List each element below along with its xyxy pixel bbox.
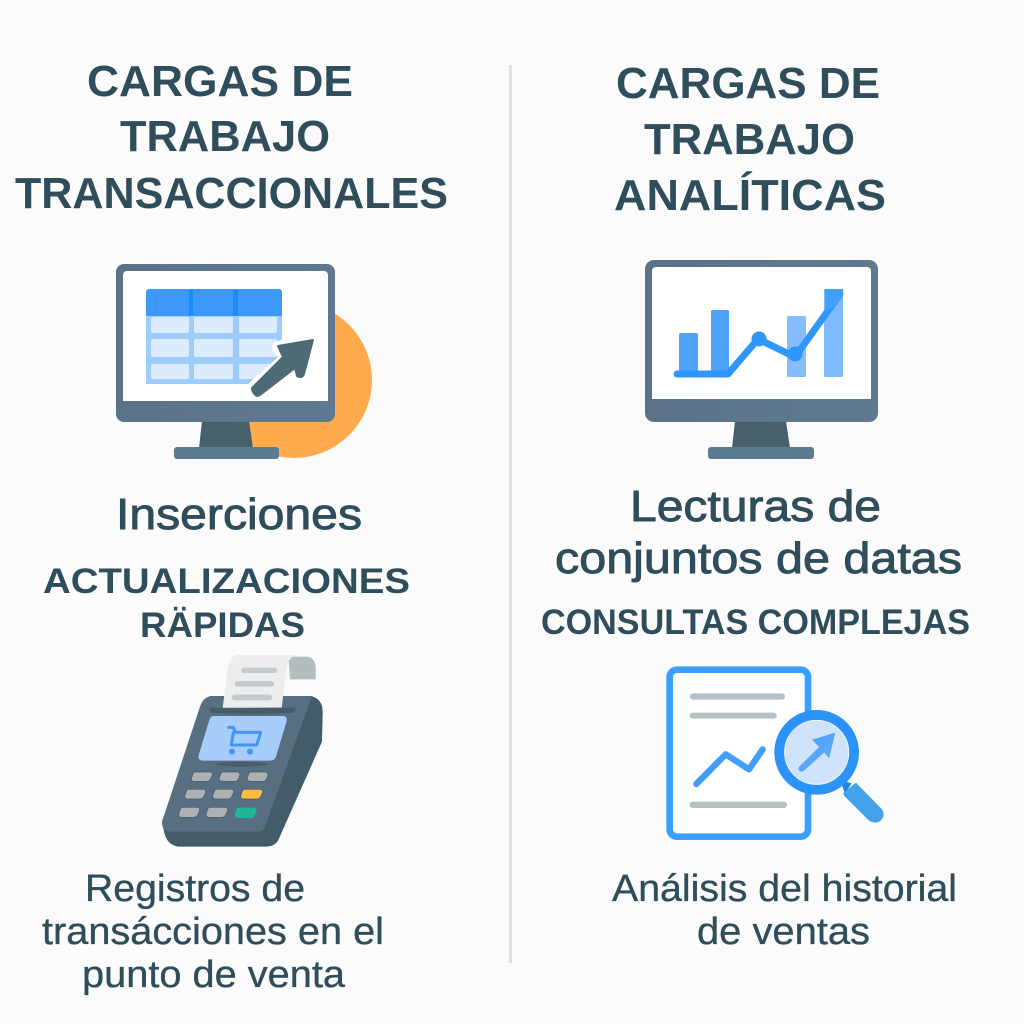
label: lecturas de conjuntos de datas — [555, 482, 962, 583]
icon: monitor with bar and line chart — [645, 260, 878, 459]
icon: point of sale terminal — [162, 655, 323, 847]
title: cargas de trabajo transaccionales: TRABAJO — [120, 112, 330, 161]
title: cargas de trabajo transaccionales — [15, 57, 448, 218]
speaker slot — [216, 762, 268, 767]
magnifying glass — [779, 715, 884, 823]
title: cargas de trabajo analíticas: CARGAS DE — [616, 59, 880, 108]
receipt — [223, 655, 316, 708]
screen — [198, 716, 287, 761]
monitor base — [708, 447, 814, 459]
title: cargas de trabajo analíticas: ANALÍTICAS — [614, 170, 886, 220]
keypad — [179, 772, 268, 818]
terminal face — [162, 696, 313, 832]
bar chart — [679, 289, 843, 377]
paper slot — [209, 708, 296, 714]
title: cargas de trabajo transaccionales: CARGAS DE — [87, 57, 353, 106]
monitor body — [645, 260, 878, 422]
title: cargas de trabajo transaccionales: TRANSACCIONALES — [15, 169, 448, 218]
document text lines — [690, 693, 787, 808]
text: registros de transacciones en el punto de venta — [42, 868, 384, 996]
label: actualizaciones rápidas: RÄPIDAS — [140, 606, 305, 645]
monitor base — [174, 447, 279, 459]
label: consultas complejas: CONSULTAS COMPLEJAS — [541, 603, 970, 642]
icon: report with magnifying glass — [670, 670, 884, 837]
handle — [840, 780, 852, 793]
label: inserciones: Inserciones — [116, 490, 362, 539]
line chart — [677, 289, 843, 374]
icon: shopping cart — [229, 727, 261, 755]
document — [670, 670, 808, 837]
text: análisis del historial de ventas: Análisis del historial — [612, 868, 957, 910]
label: lecturas de conjuntos de datas: Lecturas de — [630, 482, 881, 531]
monitor stand — [199, 421, 253, 448]
label: lecturas de conjuntos de datas: conjuntos de datas — [555, 534, 962, 583]
monitor screen — [123, 271, 328, 401]
monitor stand — [732, 421, 790, 448]
data table — [146, 289, 283, 386]
orange circle — [216, 302, 372, 458]
text: registros de transacciones en el punto de venta: punto de venta — [82, 954, 346, 996]
title: cargas de trabajo analíticas: TRABAJO — [644, 115, 855, 164]
label: actualizaciones rápidas — [43, 562, 410, 645]
text: registros de transacciones en el punto de venta: Registros de — [85, 868, 305, 910]
lens — [779, 715, 854, 790]
text: análisis del historial de ventas — [612, 868, 957, 953]
arrow — [252, 340, 313, 396]
text: análisis del historial de ventas: de ventas — [697, 911, 870, 953]
document line chart — [696, 749, 763, 784]
terminal side — [162, 696, 323, 847]
label: actualizaciones rápidas: ACTUALIZACIONES — [43, 562, 410, 601]
monitor body — [116, 264, 335, 422]
monitor screen — [652, 267, 871, 399]
lens arrow — [799, 733, 835, 772]
icon: monitor with data table and arrow — [116, 264, 372, 459]
title: cargas de trabajo analíticas — [614, 59, 886, 220]
text: registros de transacciones en el punto de venta: transácciones en el — [42, 911, 384, 953]
